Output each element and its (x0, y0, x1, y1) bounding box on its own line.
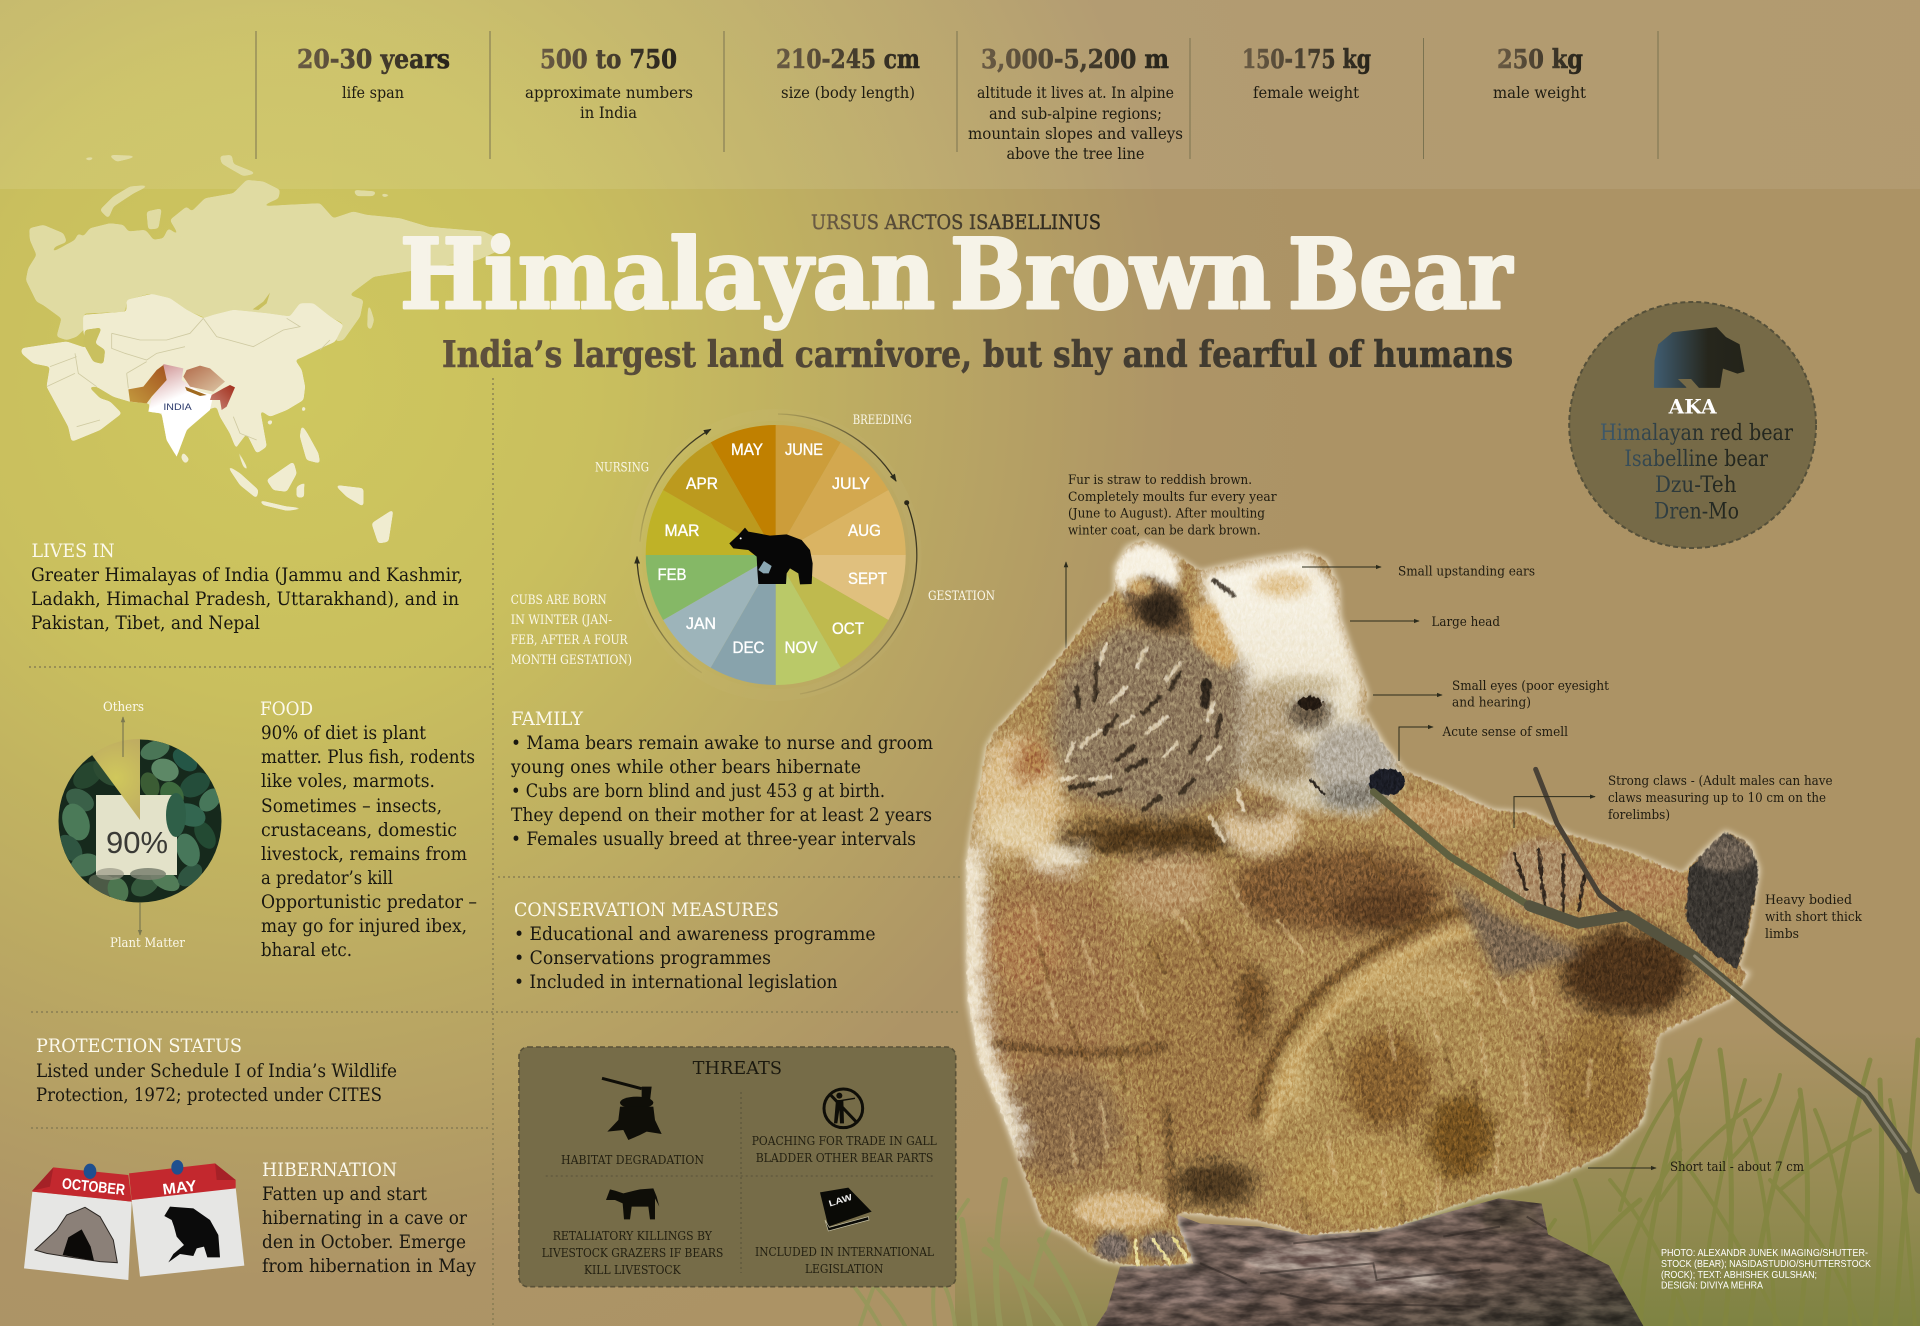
threat: retaliatory killings: KILL LIVESTOCK (584, 1262, 681, 1277)
wheel: month labels: MAR (664, 521, 700, 540)
calendar: May (129, 1160, 244, 1277)
top stats band background (0, 0, 1920, 189)
threat: habitat degradation (561, 1078, 704, 1167)
pie: plant matter label (110, 903, 186, 951)
wheel: month sectors (646, 425, 906, 685)
bear: hind leg shapes (1551, 865, 1695, 1150)
threat: retaliatory killings (542, 1188, 723, 1277)
text block: food: bharal etc. (261, 940, 352, 961)
bear: hind foot (1686, 831, 1759, 970)
text block: food (260, 699, 477, 961)
stat: numbers in India: in India (580, 104, 637, 122)
text block: hibernation: hibernating in a cave or (262, 1208, 467, 1229)
map: Nepal range (185, 387, 207, 396)
text block: food: 90% of diet is plant (261, 723, 427, 744)
AKA names: Isabelline bear (1624, 447, 1768, 472)
callout: claws (1514, 774, 1833, 828)
text block: food: FOOD (260, 699, 313, 720)
threat: habitat degradation: HABITAT DEGRADATION (561, 1152, 704, 1167)
text block: family: • Mama bears remain awake to nurse and groom (511, 733, 933, 754)
map: Russia and north (26, 155, 511, 342)
threat: poaching: BLADDER OTHER BEAR PARTS (756, 1150, 933, 1165)
text block: food: matter. Plus fish, rodents (261, 747, 475, 768)
text block: hibernation (262, 1160, 477, 1277)
callout: limbs: with short thick (1765, 910, 1862, 925)
grass background (830, 1030, 1920, 1326)
calendar: October: OCTOBER (61, 1175, 126, 1199)
bear: soft outline glow (967, 540, 1759, 1265)
text block: family: • Females usually breed at three-year intervals (511, 829, 916, 850)
map: Tibet range (183, 366, 225, 392)
threat: international legislation: LEGISLATION (805, 1261, 883, 1276)
pie: plant matter label: Plant Matter (110, 936, 186, 951)
bear: thigh shapes (1267, 950, 1506, 1218)
bear: fore paw and foot (1450, 831, 1759, 977)
pie: leaf disc (53, 735, 225, 906)
text block: family: They depend on their mother for at least 2 years (511, 805, 932, 826)
pie: 90% card (96, 795, 177, 875)
wheel: gestation arrow (800, 500, 917, 694)
calendar: October (24, 1164, 132, 1280)
wheel: breeding arrow (778, 414, 896, 481)
callout: claws: claws measuring up to 10 cm on the (1608, 791, 1826, 806)
bear: left ear (1113, 543, 1193, 633)
map: India (148, 364, 213, 457)
callout: claws: forelimbs) (1608, 808, 1670, 823)
text block: lives in: Pakistan, Tibet, and Nepal (31, 613, 260, 634)
callout: smell: Acute sense of smell (1442, 725, 1568, 740)
icon: hibernation calendars (24, 1160, 244, 1280)
bear: limb folds (993, 911, 1493, 1213)
wheel: cubs note (511, 593, 632, 668)
stat: altitude: mountain slopes and valleys (968, 125, 1183, 143)
text block: conservation measures: CONSERVATION MEASURES (514, 900, 779, 921)
wheel: nursing arrow (640, 429, 711, 542)
icon: emerging bear (164, 1207, 220, 1262)
wheel: cubs note: IN WINTER (JAN- (511, 613, 612, 628)
map: country borders (47, 318, 330, 440)
map: Pakistan range (128, 365, 167, 403)
text block: food: like voles, marmots. (261, 771, 435, 792)
wheel: month labels: OCT (832, 619, 864, 638)
stat: altitude: 3,000-5,200 m (981, 45, 1169, 75)
stat: female weight: female weight (1253, 84, 1360, 102)
wheel: cubs note: CUBS ARE BORN (511, 593, 607, 608)
callout: eyes (1373, 679, 1610, 711)
map: Lake Baikal (253, 293, 270, 310)
stat: female weight: 150-175 kg (1242, 45, 1371, 75)
stat: life span: 20-30 years (297, 45, 450, 75)
text block: family: FAMILY (511, 709, 584, 730)
stat: male weight (1493, 45, 1587, 102)
AKA names (1600, 421, 1793, 525)
wheel: month labels: DEC (732, 638, 764, 657)
text block: conservation measures: • Educational and awareness programme (514, 924, 876, 945)
stick (1373, 769, 1920, 1188)
bear: head (1200, 553, 1407, 817)
callout: limbs (1765, 893, 1862, 942)
threat: international legislation (755, 1188, 934, 1276)
photo credits: DESIGN: DIVIYA MEHRA (1661, 1280, 1763, 1292)
AKA names: Himalayan red bear (1600, 421, 1793, 446)
rock (1087, 1190, 1653, 1326)
stat: altitude: above the tree line (1006, 145, 1144, 163)
wheel: cubs note: MONTH GESTATION) (511, 653, 632, 668)
title (400, 218, 1513, 331)
wheel: month labels: JULY (832, 474, 870, 493)
note: fur colour: Completely moults fur every year (1068, 490, 1277, 505)
text block: lives in: LIVES IN (32, 541, 114, 562)
text block: hibernation: Fatten up and start (262, 1184, 428, 1205)
text block: family: young ones while other bears hibernate (510, 757, 861, 778)
text block: food: a predator’s kill (261, 868, 393, 889)
text block: conservation measures: • Conservations programmes (514, 948, 771, 969)
callout: limbs: Heavy bodied (1765, 893, 1852, 908)
wheel: nursing label: NURSING (595, 461, 649, 476)
text block: conservation measures (514, 900, 876, 993)
wheel: month labels: MAY (731, 440, 763, 459)
text block: lives in (31, 541, 463, 634)
chart: food pie (53, 700, 225, 951)
wheel: month labels: AUG (848, 521, 881, 540)
text block: hibernation: den in October. Emerge (262, 1232, 466, 1253)
pie: others wedge (92, 739, 140, 820)
threat: international legislation: INCLUDED IN INTERNATIONAL (755, 1244, 934, 1259)
callout: eyes: Small eyes (poor eyesight (1452, 679, 1610, 694)
bear: body fur (965, 540, 1760, 1267)
stat: altitude: altitude it lives at. In alpine (977, 84, 1174, 102)
subtitle: India’s largest land carnivore, but shy and fearful of humans (442, 334, 1513, 376)
stat: numbers in India (525, 45, 693, 122)
bear: face features (1297, 697, 1405, 795)
note: fur colour: (June to August). After moulting (1068, 506, 1265, 522)
callout: head: Large head (1432, 615, 1500, 630)
stat: numbers in India: approximate numbers (525, 84, 693, 102)
title: Brown (950, 218, 1271, 331)
callout: limbs: limbs (1765, 927, 1799, 942)
text block: protection status: PROTECTION STATUS (36, 1036, 242, 1057)
map of Asia with India highlighted (22, 155, 511, 543)
stat: life span (297, 45, 450, 102)
map: Asia landmass (22, 294, 393, 543)
text block: protection status (36, 1036, 397, 1106)
text block: food: Sometimes – insects, (261, 796, 442, 817)
stat: body length (776, 45, 920, 102)
bear: neck ruff (1050, 623, 1247, 817)
bear: foreleg paw shape (1073, 1192, 1193, 1267)
panel: AKA badge (1569, 302, 1816, 548)
stat: female weight (1242, 45, 1371, 102)
wheel: month labels: NOV (784, 638, 818, 657)
wheel: month labels: JUNE (785, 440, 823, 459)
stat: male weight: male weight (1493, 84, 1587, 102)
text block: food: livestock, remains from (261, 844, 467, 865)
text block: food: crustaceans, domestic (261, 820, 457, 841)
text block: hibernation: HIBERNATION (262, 1160, 397, 1181)
map label: India: INDIA (163, 402, 192, 412)
pie: others label (103, 700, 144, 757)
threat: international legislation: LAW (827, 1192, 854, 1209)
AKA names: Dren-Mo (1654, 500, 1739, 525)
wheel: month labels: FEB (658, 565, 686, 584)
wheel: gestation label: GESTATION (928, 589, 995, 604)
map: Caspian Sea (83, 328, 105, 364)
text block: protection status: Protection, 1972; protected under CITES (36, 1085, 382, 1106)
chart: breeding calendar wheel (511, 413, 995, 695)
wheel: month labels: SEPT (848, 569, 887, 588)
callout: tail: Short tail - about 7 cm (1670, 1160, 1804, 1175)
stat: altitude (968, 45, 1183, 163)
text block: lives in: Ladakh, Himachal Pradesh, Uttarakhand), and in (31, 589, 459, 610)
text block: family (510, 709, 933, 850)
callout: ears: Small upstanding ears (1398, 564, 1535, 580)
wheel: month labels: APR (686, 474, 718, 493)
calendar: May: MAY (162, 1178, 198, 1199)
threat: retaliatory killings: LIVESTOCK GRAZERS IF BEARS (542, 1245, 723, 1260)
text block: lives in: Greater Himalayas of India (Jammu and Kashmir, (31, 565, 463, 586)
photo credits: STOCK (BEAR); NASIDASTUDIO/SHUTTERSTOCK (1661, 1258, 1871, 1270)
note: fur colour: Fur is straw to reddish brown. (1068, 473, 1252, 488)
pie: 90% value: 90% (106, 825, 168, 860)
bear: neck fur streaks (1060, 580, 1243, 840)
wheel: month labels (658, 440, 887, 657)
bear photo illustration (940, 510, 1920, 1326)
bear: golden band by ear (1190, 603, 1238, 670)
note: fur colour (1066, 473, 1277, 648)
callout: smell (1399, 725, 1568, 761)
bear: body fur strands (1033, 849, 1621, 1224)
text block: food: Opportunistic predator – (261, 892, 477, 913)
text block: protection status: Listed under Schedule I of India’s Wildlife (36, 1061, 397, 1082)
stats row (256, 31, 1658, 163)
text block: hibernation: from hibernation in May (262, 1256, 477, 1277)
scientific name: URSUS ARCTOS ISABELLINUS (811, 210, 1101, 234)
photo credits: PHOTO: ALEXANDR JUNEK IMAGING/SHUTTER- (1661, 1247, 1868, 1259)
threats heading: THREATS (693, 1059, 782, 1079)
stat: life span: life span (342, 84, 404, 102)
map: north-east range (210, 385, 235, 410)
icon: cave (35, 1207, 117, 1263)
text block: conservation measures: • Included in international legislation (514, 972, 838, 993)
stat: body length: size (body length) (781, 84, 915, 102)
stat: altitude: and sub-alpine regions; (989, 105, 1162, 123)
title: Himalayan (400, 218, 935, 331)
photo credits: (ROCK); TEXT: ABHISHEK GULSHAN; (1661, 1269, 1817, 1281)
callout: eyes: and hearing) (1452, 696, 1531, 711)
text block: food: may go for injured ibex, (261, 916, 467, 937)
wheel: month labels: JAN (686, 614, 716, 633)
text block: family: • Cubs are born blind and just 453 g at birth. (511, 781, 885, 802)
panel: threats (519, 1047, 956, 1287)
stat: body length: 210-245 cm (776, 45, 920, 75)
wheel: bear and cub icon (729, 528, 813, 584)
note: fur colour: winter coat, can be dark brown. (1068, 524, 1261, 539)
wheel: breeding label: BREEDING (853, 413, 912, 428)
title: Bear (1288, 218, 1513, 331)
AKA names: Dzu-Teh (1655, 473, 1736, 498)
wheel: cubs note: FEB, AFTER A FOUR (511, 633, 629, 648)
AKA heading: AKA (1668, 395, 1717, 419)
stat: numbers in India: 500 to 750 (540, 45, 677, 75)
pie: others label: Others (103, 700, 144, 715)
threat: poaching: POACHING FOR TRADE IN GALL (752, 1133, 937, 1148)
callout: claws: Strong claws - (Adult males can have (1608, 774, 1833, 789)
icon: bear silhouette (1655, 328, 1744, 387)
threat: poaching (752, 1089, 937, 1165)
photo credits (1661, 1247, 1871, 1292)
threat: retaliatory killings: RETALIATORY KILLINGS BY (553, 1228, 713, 1243)
bear: jaw fur (1220, 797, 1300, 855)
stat: male weight: 250 kg (1497, 45, 1583, 75)
wheel: birth arrow (637, 557, 702, 673)
bear: holding paw (1450, 838, 1586, 977)
